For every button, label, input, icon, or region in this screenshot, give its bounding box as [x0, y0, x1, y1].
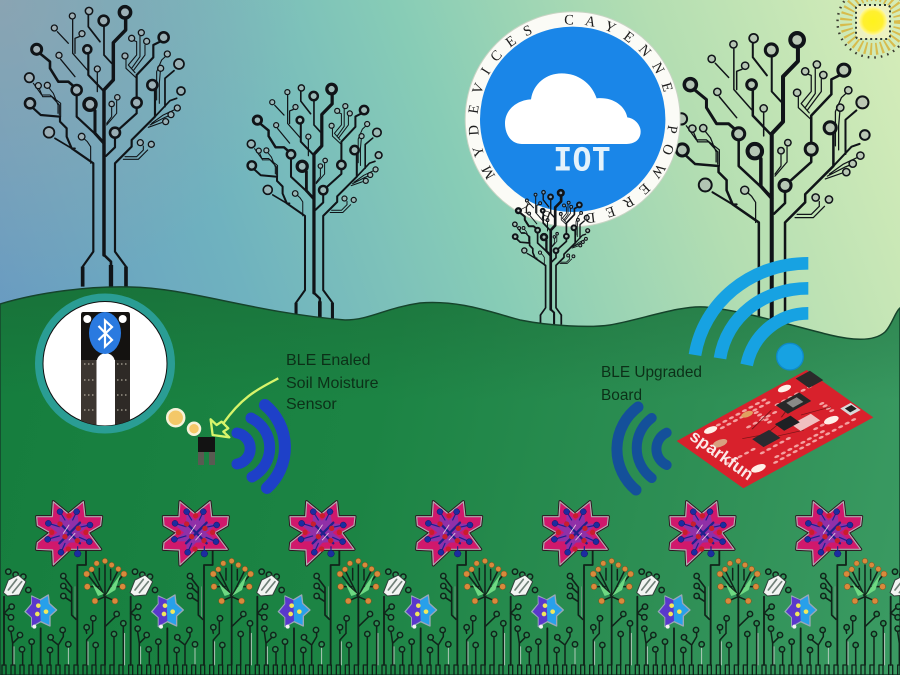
tree: middle circuit tree — [247, 84, 382, 320]
tile: flower column 8 — [889, 502, 900, 675]
label: BLE soil moisture sensor: Soil Moisture — [286, 375, 379, 392]
arrow: yellow pointer to sensor — [211, 378, 278, 437]
icon: cloud — [505, 73, 641, 144]
icon: sensor signal waves — [237, 405, 285, 488]
tile: flower column 7 — [762, 502, 887, 675]
tile: flower column 6 — [635, 502, 760, 675]
tile: flower column 2 — [129, 502, 254, 675]
icon: board signal waves — [617, 407, 667, 490]
sparkfun board: sparkfun — [686, 426, 758, 484]
label: BLE upgraded board: BLE Upgraded — [601, 364, 702, 381]
icon: sun chip — [838, 0, 900, 58]
label: BLE soil moisture sensor: BLE Enaled — [286, 352, 371, 369]
tile: flower column 3 — [255, 502, 380, 675]
tree: right circuit tree — [676, 33, 870, 372]
tile: flower column 1 — [2, 502, 127, 675]
panel: sensor close-up circle — [39, 298, 171, 430]
label: IOT: IOT — [553, 140, 611, 178]
icon: small soil sensor — [198, 437, 215, 465]
logo: MyDevices Cayenne IOT badge — [464, 11, 681, 228]
tree: large left circuit tree — [25, 7, 185, 287]
sparkfun board — [677, 369, 875, 488]
icon: wifi signal — [695, 263, 808, 370]
tile: flower column 5 — [509, 502, 634, 675]
hill — [0, 287, 900, 675]
tree: small tree over badge — [513, 190, 590, 325]
icon: bluetooth — [98, 320, 112, 346]
label: ring text: MYDEVICES CAYENNE POWERED BY — [468, 14, 678, 223]
bubbles linking close-up to sensor — [167, 409, 200, 435]
label: BLE soil moisture sensor: Sensor — [286, 396, 337, 413]
tile: flower column 4 — [382, 502, 507, 675]
label: BLE upgraded board: Board — [601, 387, 642, 404]
